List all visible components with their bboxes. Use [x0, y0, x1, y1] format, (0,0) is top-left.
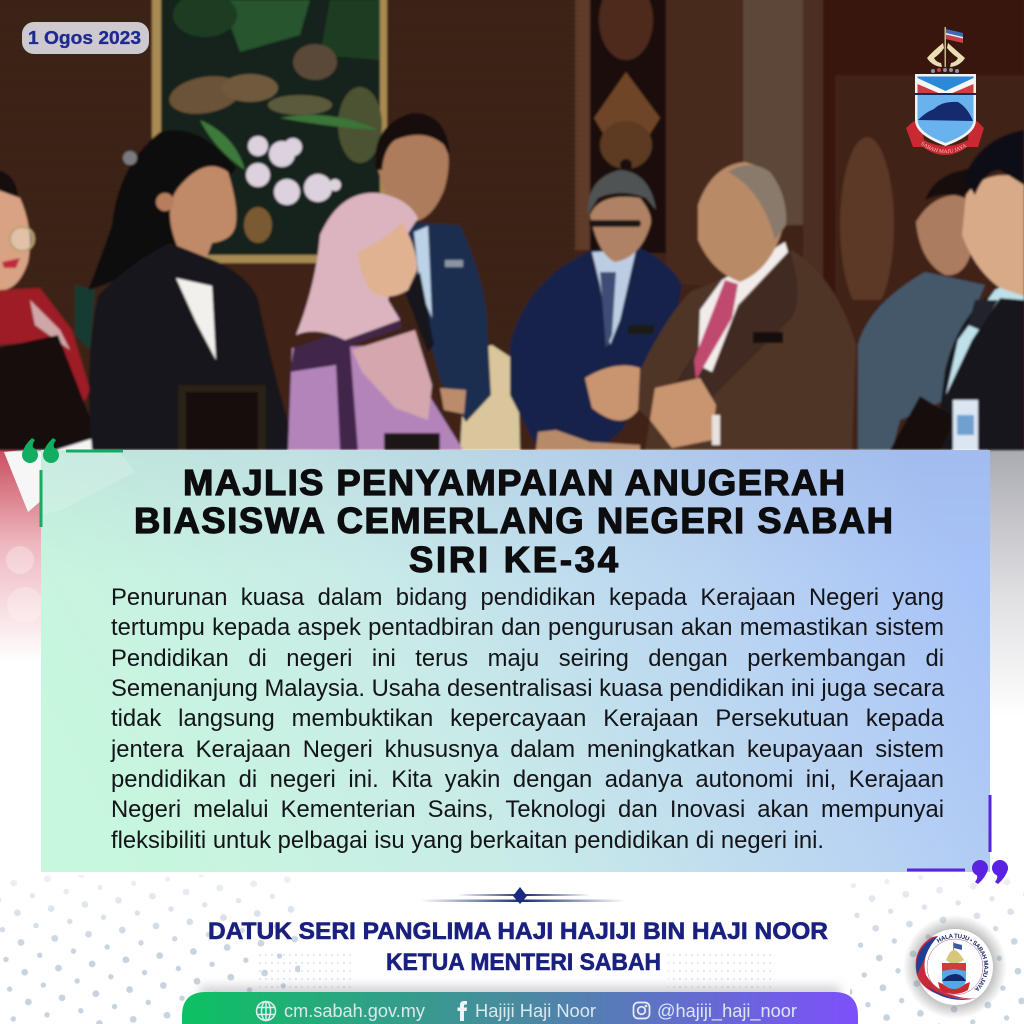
body paragraph: Semenanjung Malaysia. Usaha desentralisasi kuasa pendidikan ini juga secara: [111, 675, 944, 702]
photo: officials and scholarship recipients: [0, 0, 1024, 450]
title: [134, 462, 893, 580]
website text: cm.sabah.gov.my: [284, 1001, 425, 1021]
mini crest: [938, 942, 970, 994]
photo person: young man in black suit: [890, 130, 1024, 450]
body paragraph: tertumpu kepada aspek pentadbiran dan pengurusan akan memastikan sistem: [111, 614, 944, 641]
icon: globe: [256, 1002, 276, 1020]
flag: [944, 27, 963, 67]
opening quote decoration: [22, 438, 123, 527]
icon: facebook: [458, 1001, 467, 1021]
date pill: [22, 22, 149, 54]
speaker name and title: [208, 918, 828, 976]
facebook text: Hajiji Haji Noor: [475, 1001, 596, 1021]
round seal: HALA TUJU • SABAH MAJU JAYA: [936, 934, 988, 991]
body paragraph: Penurunan kuasa dalam bidang pendidikan kepada Kerajaan Negeri yang: [111, 584, 944, 611]
photo person: man in navy suit behind: [375, 113, 491, 422]
photo wall: [0, 0, 1024, 450]
photo person: woman in pink hijab: [288, 193, 463, 450]
body paragraph: Negeri melalui Kementerian Sains, Teknologi dan Inovasi akan mempunyai: [111, 796, 944, 823]
title: SIRI KE-34: [409, 539, 619, 580]
text panel background: [41, 450, 990, 872]
photo chair: [460, 345, 520, 450]
photo person: woman in batik: [0, 170, 117, 450]
round seal: [905, 917, 1005, 1017]
Sabah state crest: [906, 27, 984, 155]
body paragraph: jentera Kerajaan Negeri khususnya dalam meningkatkan keupayaan sistem: [111, 736, 944, 763]
social media bar: [182, 986, 858, 1024]
title: MAJLIS PENYAMPAIAN ANUGERAH: [183, 462, 845, 503]
ornament divider: [420, 887, 625, 904]
side photo fade strips: [0, 448, 1024, 718]
wreath: [931, 68, 959, 73]
photo person: man in centre navy suit: [510, 170, 682, 450]
arms: [927, 43, 965, 67]
closing quote decoration: [907, 795, 1008, 884]
body paragraph: Pendidikan di negeri ini terus maju seiring dengan perkembangan di: [111, 645, 944, 672]
body paragraph: pendidikan di negeri ini. Kita yakin dengan adanya autonomi ini, Kerajaan: [111, 766, 944, 793]
photo painting: [152, 0, 387, 263]
photo person: woman in black blazer: [88, 130, 296, 450]
photo person: man in brown suit: [585, 162, 856, 450]
instagram text: @hajiji_haji_noor: [657, 1001, 797, 1022]
speaker name and title: KETUA MENTERI SABAH: [386, 949, 661, 976]
title: BIASISWA CEMERLANG NEGERI SABAH: [134, 500, 893, 541]
date pill: 1 Ogos 2023: [28, 28, 141, 48]
ribbon: SABAH MAJU JAYA: [921, 142, 967, 153]
speaker name and title: DATUK SERI PANGLIMA HAJI HAJIJI BIN HAJI NOOR: [208, 918, 828, 945]
body paragraph: fleksibiliti untuk pelbagai isu yang berkaitan pendidikan di negeri ini.: [111, 827, 824, 854]
background dots pattern: [0, 875, 1024, 1024]
body paragraph: [110, 584, 944, 854]
icon: instagram: [634, 1002, 650, 1018]
photo person: man in grey shirt: [858, 168, 985, 450]
photo carved panels: [590, 0, 894, 440]
body paragraph: tidak langsung membuktikan kepercayaan Kerajaan Persekutuan kepada: [111, 705, 944, 732]
shield: [915, 74, 976, 146]
